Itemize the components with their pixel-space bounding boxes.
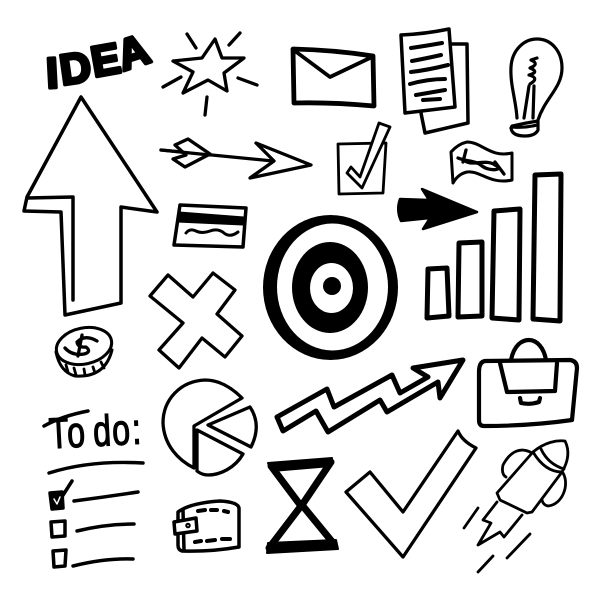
icon: target — [263, 215, 398, 360]
icon: dart arrow — [161, 139, 311, 178]
unchecked item — [51, 521, 134, 537]
pie chart — [163, 380, 256, 475]
icon: coin — [53, 323, 115, 376]
heading: To do: To do: — [48, 406, 142, 459]
icon: light bulb — [511, 39, 562, 136]
icon: envelope — [293, 49, 374, 106]
heading: IDEA: IDEA — [45, 25, 156, 98]
icon: X mark — [150, 273, 242, 368]
icon: hourglass — [267, 458, 338, 553]
checked item — [50, 481, 138, 509]
icon: star with rays — [163, 33, 257, 115]
icon: documents — [401, 29, 468, 133]
icon: briefcase — [479, 340, 577, 426]
icon: zigzag growth arrow — [277, 360, 463, 432]
icon: rocket — [464, 441, 568, 572]
unchecked item — [53, 550, 133, 567]
icon: banknote — [451, 142, 512, 183]
icon: credit card — [174, 205, 246, 247]
icon: large outlined up arrow — [24, 97, 157, 315]
bar chart — [427, 174, 561, 321]
icon: wallet — [174, 501, 239, 551]
icon: solid black arrow — [398, 189, 477, 229]
icon: large check mark — [346, 431, 476, 557]
to-do list — [49, 462, 143, 567]
icon: checkbox with tick — [338, 123, 390, 194]
